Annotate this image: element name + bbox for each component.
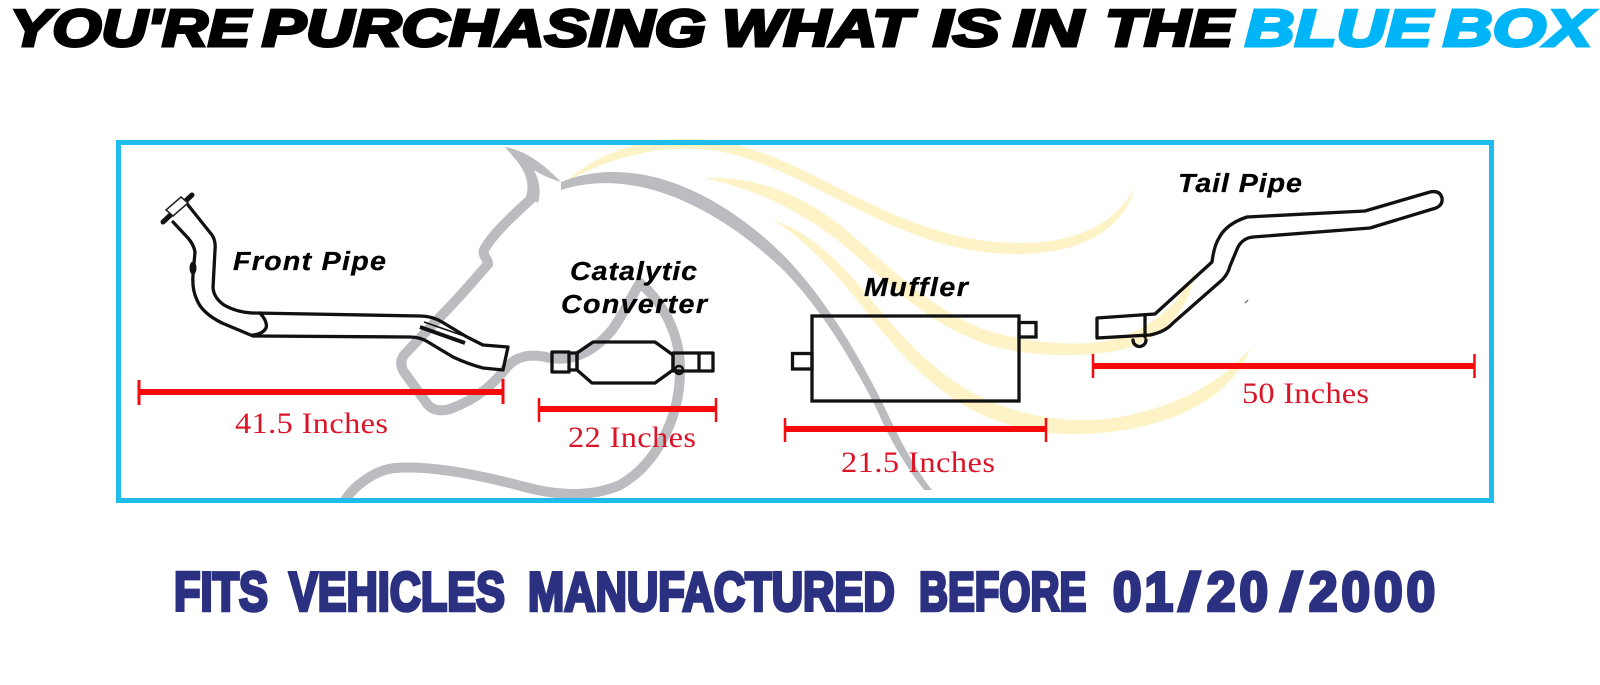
icon: muffler (792, 316, 1036, 401)
panel: front pipe (139, 195, 508, 440)
label: tail pipe: Tail Pipe (1178, 168, 1302, 198)
icon: catalytic converter (552, 342, 713, 383)
measurement: 21.5 inches: 21.5 Inches (841, 445, 995, 479)
icon: front pipe (163, 195, 508, 370)
label: catalytic converter (561, 256, 708, 319)
dimension thick line (785, 426, 1046, 432)
title: PURCHASING (262, 0, 706, 57)
panel: tail pipe (1093, 168, 1474, 410)
title: THE (1105, 0, 1235, 58)
measurement: 22 inches: 22 Inches (568, 420, 696, 454)
title: BLUE (1245, 0, 1435, 57)
footer note (174, 560, 1435, 623)
label: muffler: Muffler (864, 272, 969, 302)
footer note: MANUFACTURED (528, 560, 895, 623)
footer note: / (1279, 561, 1303, 622)
title: YOU'RE (10, 0, 253, 58)
title: IN (1013, 0, 1085, 58)
blue box (118, 142, 1492, 500)
footer note: FITS (174, 561, 268, 623)
label: catalytic converter: Catalytic (570, 256, 697, 286)
label: front pipe: Front Pipe (233, 246, 386, 276)
panel: muffler (785, 272, 1046, 479)
dimension bar: catalytic converter (539, 398, 716, 422)
title: WHAT (722, 0, 918, 57)
dimension bar: front pipe (139, 379, 503, 405)
footer note: 01 (1113, 562, 1173, 623)
title: IS (933, 0, 1000, 58)
dimension bar: muffler (785, 418, 1046, 442)
footer note: BEFORE (919, 561, 1086, 623)
title: BOX (1443, 0, 1596, 57)
footer note: 20 (1207, 562, 1268, 623)
panel: catalytic converter (539, 256, 716, 454)
watermark: horse logo (345, 139, 1250, 500)
footer note: VEHICLES (289, 561, 505, 623)
label: catalytic converter: Converter (561, 289, 708, 319)
measurement: 41.5 inches: 41.5 Inches (235, 406, 388, 440)
footer note: / (1177, 561, 1201, 622)
title (10, 0, 1596, 58)
dimension thick line (1093, 363, 1474, 369)
icon: tail pipe (1097, 192, 1442, 346)
dimension thick line (139, 389, 503, 395)
dimension bar: tail pipe (1093, 354, 1474, 378)
dimension thick line (539, 406, 716, 412)
footer note: 2000 (1309, 562, 1435, 623)
measurement: 50 inches: 50 Inches (1242, 376, 1369, 410)
